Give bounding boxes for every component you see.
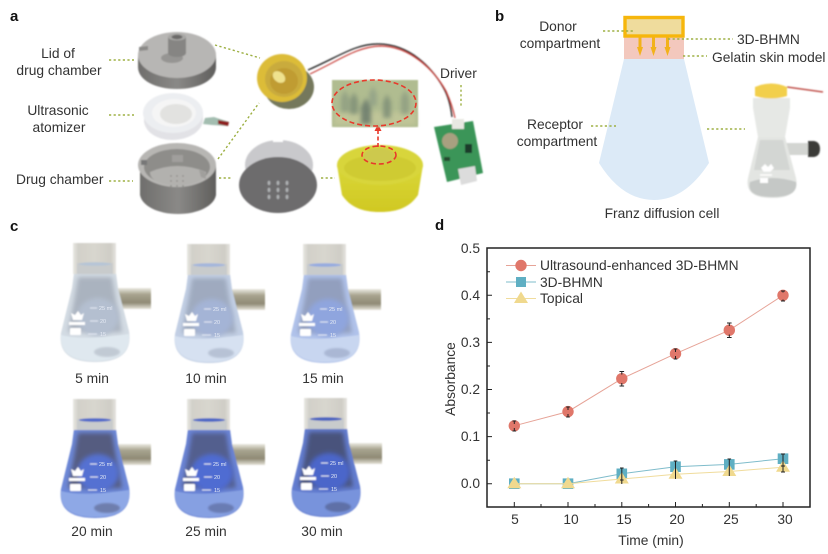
x axis tick labels: 5 [511,512,519,527]
photo: Franz cell flask [748,84,823,198]
label: drug chamber: Drug chamber [16,172,104,187]
gelatin skin model [624,37,684,59]
wire to driver [308,44,455,118]
dashed ellipse on photo [332,80,416,126]
x axis title: Time (min) [618,533,684,548]
leader lines b [591,31,745,129]
x axis tick labels: 30 [777,512,793,527]
label: Franz diffusion cell: Franz diffusion cell [605,206,719,221]
panel label b: b [495,8,504,25]
error bars lower series [620,454,785,484]
legend: Topical [540,291,583,306]
y axis tick labels [461,241,480,491]
y axis title: Absorbance [443,342,458,416]
icon: chamber underside [239,139,317,213]
label: donor compartment: Donor [539,19,577,34]
legend: Ultrasound-enhanced 3D-BHMN [540,258,739,273]
x axis tick labels: 15 [616,512,632,527]
time labels [71,371,344,539]
y axis tick labels: 0.5 [461,241,480,256]
y axis tick labels: 0.1 [461,429,480,444]
flask 25 min [175,399,265,518]
dashed circle on patch [362,146,396,164]
y axis tick labels: 0.0 [461,476,480,491]
leader lines a [109,45,461,181]
icon: gold atomizer device [257,54,314,109]
y axis tick labels: 0.3 [461,335,480,350]
icon: drug chamber [138,143,216,214]
time labels: 10 min [185,371,227,386]
microneedles [637,37,670,56]
panel label a: a [10,8,19,25]
x axis tick labels [511,512,793,527]
flask 10 min [175,244,265,363]
donor compartment [625,18,683,36]
panel: a device assembly [10,8,483,214]
label: ultrasonic atomizer: atomizer [33,120,86,135]
flask 30 min [292,398,382,517]
legend [506,258,739,306]
label: donor compartment: compartment [520,36,600,51]
series: ultrasound-enhanced 3D-BHMN [509,290,789,431]
icon: ultrasonic atomizer [143,93,229,140]
label: lid of drug chamber: drug chamber [16,63,102,78]
label: lid of drug chamber: Lid of [41,46,75,61]
label: 3D-BHMN: 3D-BHMN [737,32,800,47]
label: driver: Driver [440,66,477,81]
label: receptor compartment: Receptor [527,117,583,132]
x axis tick labels: 25 [723,512,739,527]
series: 3D-BHMN [509,453,788,489]
icon: yellow microneedle patch [337,145,423,212]
time labels: 30 min [301,524,343,539]
icon: lid of drug chamber [138,32,216,89]
flask 15 min [291,244,381,363]
time labels: 25 min [185,524,227,539]
label: ultrasonic atomizer: Ultrasonic [27,103,89,118]
time labels: 5 min [75,371,109,386]
panel: c flask time series [10,218,382,539]
x axis tick labels: 20 [669,512,685,527]
x axis tick labels: 10 [563,512,579,527]
time labels: 15 min [302,371,344,386]
panel: b Franz diffusion cell [495,8,826,221]
flask 5 min [61,243,151,362]
plot frame and ticks [487,248,810,507]
photo: microneedle close-up [332,80,418,127]
label: gelatin skin model: Gelatin skin model [712,50,826,65]
legend: 3D-BHMN [540,275,603,290]
label: receptor compartment: compartment [517,134,597,149]
panel: d absorbance line chart [435,217,810,548]
arrow: zoom from patch to photo [374,124,382,147]
series: topical [507,460,790,488]
y axis tick labels: 0.2 [461,382,480,397]
panel label d: d [435,217,444,234]
panel label c: c [10,218,18,235]
icon: driver circuit board [434,119,483,185]
time labels: 20 min [71,524,113,539]
flask 20 min [61,399,151,518]
receptor compartment shape [599,59,709,200]
y axis tick labels: 0.4 [461,288,480,303]
